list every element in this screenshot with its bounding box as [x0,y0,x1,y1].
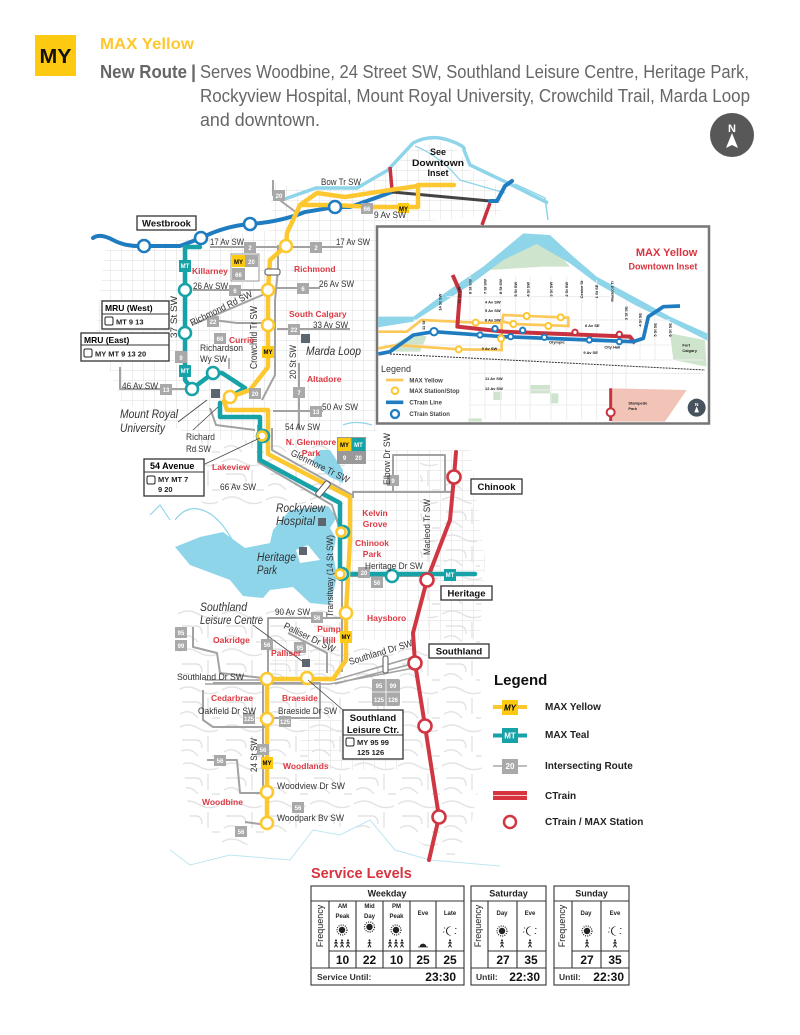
intersecting route badges: 6 [233,289,237,295]
table: Weekday: 10 [336,953,349,967]
transfer block: Crowchild: MY [234,260,243,266]
community labels: Pump [317,624,341,634]
legend item: Intersecting Route [493,759,633,774]
table: Weekday: Mid [364,904,375,910]
road labels: 37 St SW [169,296,180,338]
table: Saturday [471,886,546,985]
community labels: Altadore [307,374,342,384]
table: Sunday: 22:30 [593,970,624,984]
stop box: MRU West: MRU (West) [105,303,153,313]
inset river [378,233,707,341]
stop box: Southland Leisure Ctr: MY 95 99 [357,738,389,747]
legend item: MAX Yellow: MY [504,704,517,712]
table: Sunday: 35 [608,953,622,967]
stop box: 54 Avenue: MY MT 7 [158,475,188,484]
community labels: Park [363,549,381,559]
road labels: 46 Av SW [122,381,158,392]
intersecting route badges: 20 [276,194,283,200]
table: Sunday: 27 [580,953,594,967]
CTrain stations [138,201,341,252]
community labels: Kelvin [362,508,388,518]
table: Saturday: 22:30 [509,970,540,984]
road labels [122,177,433,824]
transfer block: Southland: 125 [374,698,385,704]
intersecting route badges: 56 [217,759,224,765]
table: Saturday: Eve [525,911,536,917]
legend item: MAX Teal: MT [504,732,516,740]
road labels: Oakfield Dr SW [198,706,256,717]
inset street labels: Olympic [549,340,566,345]
community labels: Cedarbrae [211,693,253,703]
leader lines [178,358,343,710]
landmark labels: University [120,423,166,435]
community labels: Woodbine [202,797,243,807]
route labels on lines: MT [181,264,190,270]
icon: north compass: N [728,123,736,135]
legend [493,672,643,828]
stop box: Southland Leisure Ctr [343,710,403,759]
community labels: Hill [322,635,336,645]
intersecting route badges: 66 [364,207,371,213]
road labels: Wy SW [200,354,227,365]
community labels: Braeside [282,693,318,703]
intersecting route badges: 9 [391,479,395,485]
legend item: CTrain MAX Station [504,816,643,828]
landmark labels: Leisure Centre [200,615,263,627]
route labels on lines: MY [262,761,272,767]
community labels: Richmond [294,264,336,274]
intersecting route badges: 7 [297,391,301,397]
intersecting route badges: 99 [178,644,185,650]
downtown inset pointer: Downtown [412,158,464,168]
inset street labels: 4 St SW [526,282,531,297]
icon: north compass [710,113,754,157]
legend item: CTrain [493,791,576,802]
inset legend: MAX Yellow [409,378,443,384]
community labels: Oakridge [213,635,250,645]
landmark labels [120,346,362,627]
community labels: N. Glenmore [286,437,337,447]
table: Saturday: 35 [524,953,538,967]
road labels: Woodview Dr SW [277,781,345,792]
community labels [192,264,406,807]
road labels: Richardson [200,343,243,354]
inset compass [688,399,706,417]
landmark labels: Hospital [276,516,315,528]
inset streets [383,273,703,420]
service levels heading: Service Levels [311,866,412,882]
intersecting route badges: 56 [314,616,321,622]
inset street labels: 2 St SW [564,282,569,297]
table: Saturday: Frequency [473,904,483,947]
inset street labels: 5 Av SW [485,308,501,313]
downtown inset pointer: See [430,147,446,157]
description: new route summary: Serves Woodbine, 24 Street SW, Southland Leisure Centre, Heritage Park, [200,62,749,82]
inset legend: MAX Station/Stop [409,389,460,395]
inset park green areas [390,243,707,422]
stop box: MRU West [102,301,169,329]
inset street labels: 12 Av SW [485,386,503,391]
inset street labels: 7 St SW [482,279,487,294]
CTrain downtown tunnel [392,192,490,201]
table: Sunday: Frequency [557,904,567,947]
road labels: Richmond Rd SW [188,289,254,329]
table: Weekday: Day [364,914,376,920]
landmark labels: Marda Loop [306,346,362,358]
inset street labels: 6 St SW [498,279,503,294]
intersecting route badges: 22 [291,328,298,334]
downtown inset pointer [412,147,464,178]
inset title: Downtown Inset [628,261,697,271]
stop box: 54 Avenue: 9 20 [158,485,173,494]
transfer block: Southland: 99 [390,684,397,690]
inset street labels: 11 St [421,320,426,330]
table: Weekday: 23:30 [425,970,456,984]
inset street labels: 6 Av SE [585,323,600,328]
MAX Yellow stations [224,240,352,829]
legend item: Intersecting Route: 20 [506,762,515,771]
community labels: Woodlands [283,761,329,771]
inset street labels: 9 Av SE [583,350,598,355]
inset street labels: 3 St SE [623,306,628,320]
road labels: Heritage Dr SW [365,561,423,572]
transfer block: Crowchild [231,254,259,281]
stop box: MRU West: MT 9 13 [116,318,144,326]
route labels on lines: MT [181,369,190,375]
description: new route summary [100,62,750,130]
table: Weekday: Eve [418,911,429,917]
inset railway [390,354,705,370]
table: Weekday: PM [392,904,401,910]
station label: Westbrook [137,216,196,230]
intersecting route badges: 125 [280,720,291,726]
inset title [628,247,698,271]
community labels: Chinook [355,538,389,548]
stop box: Southland Leisure Ctr: 125 126 [357,748,384,757]
intersecting route badges: 95 [178,631,185,637]
road labels: 54 Av SW [285,422,320,433]
legend item: CTrain MAX Station: CTrain / MAX Station [545,817,643,828]
inset legend: CTrain Line [409,400,443,406]
table: Weekday: AM [338,904,347,910]
road labels: Bow Tr SW [321,177,361,188]
legend item: MAX Teal: MAX Teal [545,730,589,741]
intersecting route badges: 9 [179,356,183,362]
transfer block: Crowchild: 66 [235,273,242,279]
inset stations [430,313,622,416]
inset legend: Legend [381,364,411,374]
community labels: Currie [229,335,254,345]
route labels on lines: MT [446,573,455,579]
road labels: 17 Av SW [210,237,244,248]
road labels: Macleod Tr SW [422,499,433,555]
table: Saturday: 27 [496,953,510,967]
landmark labels: Southland [200,602,248,614]
inset street labels: 5 St SE [652,323,657,337]
transfer block: Southland: 126 [388,698,399,704]
inset blue line [378,306,680,354]
stop box: 54 Avenue: 54 Avenue [150,461,194,471]
intersecting route badges: 13 [313,410,320,416]
road labels: 9 Av SW [374,210,406,221]
inset street labels: Centre St [579,280,584,298]
stop box: MRU East [81,333,169,361]
description: new route summary: New Route [100,62,187,82]
road labels: Transitway (14 St SW) [325,535,336,617]
community labels: Park [302,448,320,458]
description: new route summary: Rockyview Hospital, Mount Royal University, Crowchild Trail, Marda Loop [200,86,750,106]
intersecting roads [120,180,453,825]
transfer block: Glenmore: MY [340,443,349,449]
transfer block: Southland [372,679,400,706]
inset street labels: Calgary [682,348,698,353]
table: Sunday: Sunday [575,888,608,898]
legend item: Intersecting Route: Intersecting Route [545,761,633,772]
table: Sunday: Day [580,911,592,917]
transfer block: Glenmore: 9 [343,456,347,462]
stop box: MRU East: MY MT 9 13 20 [95,350,146,358]
inset stampede park [612,388,687,422]
intersecting route badges: 20 [252,392,259,398]
inset street labels: Stampede [628,401,648,406]
intersecting route badges: 2 [314,246,318,252]
landmark labels: Park [257,565,278,577]
transfer block: Southland: 95 [376,684,383,690]
table: Weekday: 10 [390,953,403,967]
community labels: Grove [363,519,388,529]
inset street labels: 11 St SW [457,286,462,303]
inset compass: N [695,402,699,408]
inset legend [381,364,460,418]
road labels: 90 Av SW [275,607,310,618]
street network base [96,142,505,862]
inset street labels: City Hall [604,344,620,349]
route labels on lines: MY [342,635,350,641]
stop box: MRU East: MRU (East) [84,335,130,345]
landmark labels: Heritage [257,552,296,564]
inset street labels: Park [628,406,638,411]
intersecting route badges: 66 [217,337,224,343]
road labels: Rd SW [186,444,211,455]
community labels: Killarney [192,266,228,276]
table: Weekday: 22 [363,953,376,967]
inset street labels: 6 Av SW [485,318,501,323]
intersecting route badges: 95 [297,646,304,652]
inset street labels: 8 St SW [467,279,472,294]
inset street labels [421,279,698,411]
road labels: Palliser Dr SW [282,621,337,655]
inset street labels: 4 Av SW [485,299,501,304]
station label: Heritage [441,586,492,600]
inset street labels: 3 St SW [548,282,553,297]
community labels: Palliser [271,648,302,658]
legend item: CTrain: CTrain [545,791,576,802]
inset street labels: Fort [682,343,691,348]
stop box: 54 Avenue [144,459,204,496]
transfer block: Glenmore: 20 [355,456,362,462]
road labels: Southland Dr SW [348,638,414,668]
route labels on lines: MY [264,350,272,356]
inset street labels: 11 Av SW [485,376,503,381]
inset yellow line [378,315,568,350]
intersecting route badges: 56 [238,830,245,836]
table: Weekday: Weekday [368,888,406,898]
route badge: MY [35,35,76,76]
downtown inset pointer: Inset [427,168,449,178]
table: Weekday [311,886,464,985]
road labels: Richard [186,432,215,443]
intersecting route badges: 125 [244,717,255,723]
transfer block: Crowchild: 20 [248,260,255,266]
inset title: MAX Yellow [636,247,698,259]
road labels: 26 Av SW [319,279,354,290]
stop box: Southland Leisure Ctr: Leisure Ctr. [347,725,399,736]
MAX Yellow line [224,185,454,823]
panel: downtown inset [377,226,709,424]
transfer block: Glenmore [337,437,366,464]
rivers and reservoir [150,138,548,866]
route labels on lines [179,203,456,769]
community labels: Lakeview [212,462,250,472]
road labels: 24 St SW [249,738,260,772]
station label: Southland [429,644,489,658]
inset street labels: 4 St SE [637,313,642,327]
CTrain / MAX red stations [408,470,460,824]
road labels: 66 Av SW [220,482,256,493]
table: Weekday: Frequency [315,904,325,947]
table: Sunday: Eve [610,911,621,917]
road labels: 20 St SW [288,345,299,379]
inset street labels: 6 St SE [667,323,672,337]
landmark labels: Mount Royal [120,409,178,421]
inset street labels: Macleod Tr [610,280,615,302]
community labels: Haysboro [367,613,406,623]
intersecting route badges: 13 [163,388,170,394]
inset street labels: 14 St SW [437,293,442,311]
table: Sunday: Until: [559,972,581,982]
transfer block: Glenmore: MT [354,443,363,449]
road labels: 50 Av SW [322,402,358,413]
intersecting route badges: 20 [361,571,368,577]
CTrain blue line [93,192,392,246]
table: Saturday: Until: [476,972,498,982]
legend item: MAX Yellow [493,700,601,715]
table: Weekday: 25 [443,953,457,967]
station label: Southland: Southland [436,646,482,658]
inset red line [453,275,635,343]
route labels on lines: MY [399,207,408,213]
landmark labels: Rockyview [276,503,326,515]
inset street labels: 5 St SW [513,282,518,297]
MAX Teal stations [179,284,398,582]
MAX Teal line [185,247,475,574]
inset street labels: 1 St SE [594,284,599,298]
intersecting route badges: 56 [374,581,381,587]
road labels: Southland Dr SW [177,672,244,683]
legend heading: Legend [494,672,547,689]
road labels: Crowchild Tr SW [249,306,260,369]
intersecting route badges: 56 [264,643,271,649]
intersecting route badges: 56 [260,748,267,754]
inset street labels: 9 Av SW [482,346,498,351]
inset legend: CTrain Station [409,412,450,418]
table: Weekday: 25 [416,953,430,967]
table: Weekday: Late [444,911,457,917]
route badge: MY: MY [40,46,72,68]
intersecting route badges: 6 [301,287,305,293]
legend item: MAX Yellow: MAX Yellow [545,702,601,713]
table: Saturday: Saturday [489,888,528,898]
table: Weekday: Service Until: [317,972,371,982]
CTrain red line downtown [390,167,490,225]
table: Weekday: Peak [389,914,404,920]
table: Saturday: Day [496,911,508,917]
station label: Chinook: Chinook [478,482,516,493]
road labels: 26 Av SW [193,281,228,292]
CTrain red line south [413,452,456,860]
station label: Heritage: Heritage [447,588,486,600]
description: new route summary: | [191,62,196,82]
road labels: Elbow Dr SW [382,433,393,485]
description: new route summary: and downtown. [200,110,320,130]
title: MAX Yellow: MAX Yellow [100,36,195,53]
intersecting route badges [160,190,399,837]
CTrain blue line east [490,181,512,201]
stop box: Southland Leisure Ctr: Southland [350,713,396,724]
intersecting route badges: 22 [210,320,217,326]
community labels: South Calgary [289,309,347,319]
road labels: 17 Av SW [336,237,370,248]
station label: Chinook [471,479,522,494]
road labels: Woodpark Bv SW [277,813,344,824]
intersecting route badges: 56 [295,806,302,812]
table: Sunday [554,886,629,985]
road labels: 33 Av SW [313,320,348,331]
intersecting route badges: 2 [248,246,252,252]
road labels: Braeside Dr SW [278,706,337,717]
legend item: MAX Teal [493,728,589,743]
inset south red line [606,388,615,421]
overpass pills [265,269,388,673]
table: Weekday: Peak [335,914,350,920]
road labels: Glenmore Tr SW [289,448,351,486]
station label: Westbrook: Westbrook [142,218,192,230]
landmark markers [211,334,326,667]
